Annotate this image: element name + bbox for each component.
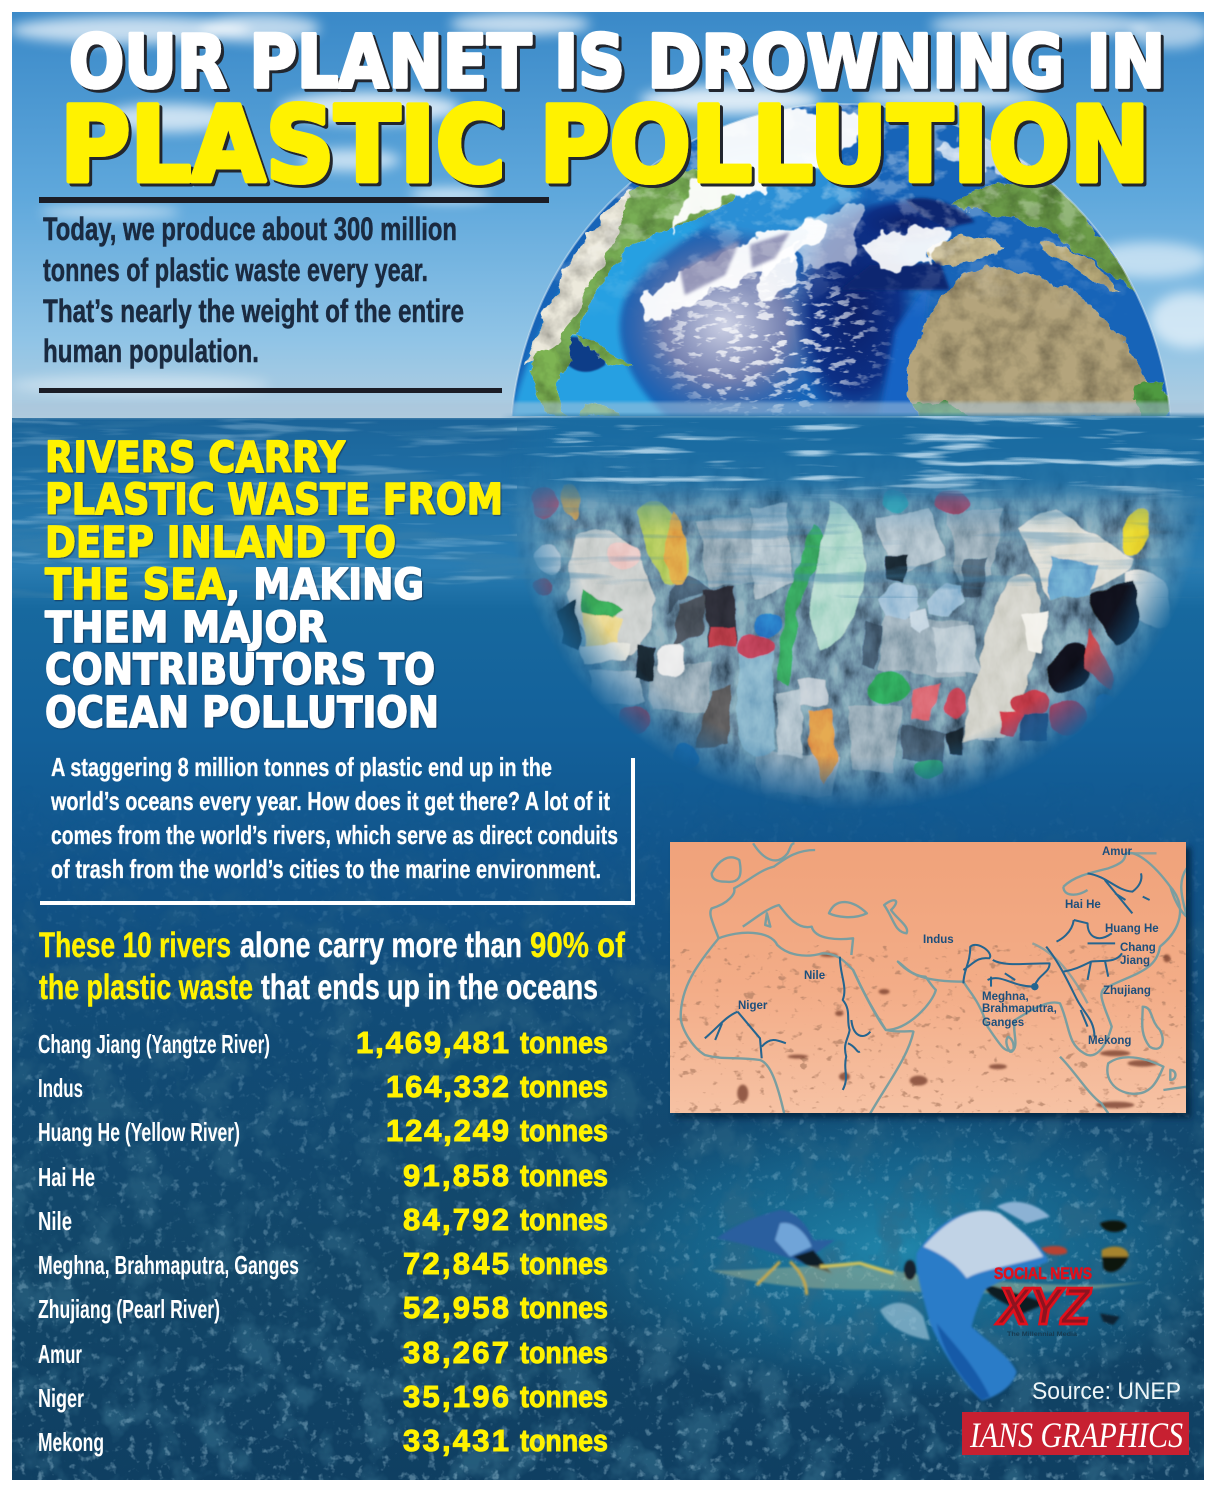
rivers sub-heading: alone carry more than	[240, 926, 522, 965]
rivers heading: THEM MAJOR	[45, 603, 327, 653]
navy sea patches	[840, 198, 975, 290]
paragraph with bracket: of trash from the world’s cities to the marine environment.	[51, 854, 601, 884]
river names list: Niger	[38, 1383, 84, 1413]
river tonnage values: tonnes	[520, 1158, 608, 1193]
map labels	[738, 846, 1159, 1047]
map labels: Chang	[1120, 942, 1156, 954]
map labels: Meghna,	[982, 991, 1029, 1003]
river names list: Mekong	[38, 1427, 104, 1457]
cloud bands	[640, 108, 1030, 325]
river names list: Huang He (Yellow River)	[38, 1117, 240, 1147]
panel: river map	[670, 842, 1191, 1113]
river tonnage values: 84,792	[403, 1202, 509, 1237]
intro text block: tonnes of plastic waste every year.	[43, 252, 428, 288]
map labels: Ganges	[982, 1017, 1024, 1029]
river tonnage values: 91,858	[403, 1158, 509, 1193]
rivers sub-heading: 90% of	[530, 926, 625, 965]
map labels: Zhujiang	[1103, 985, 1151, 997]
river tonnage values: 52,958	[403, 1290, 509, 1325]
river tonnage values: tonnes	[520, 1246, 608, 1281]
river tonnage values: tonnes	[520, 1113, 608, 1148]
map labels: Huang He	[1105, 923, 1159, 935]
rivers heading: , MAKING	[226, 560, 424, 610]
river tonnage values: 1,469,481	[356, 1025, 509, 1060]
globe: plastic waste underwater	[514, 472, 1195, 806]
rivers heading	[45, 433, 503, 738]
title line 2: PLASTIC POLLUTION	[60, 84, 1150, 206]
river tonnage values: tonnes	[520, 1423, 608, 1458]
rivers sub-heading: the plastic waste	[39, 968, 253, 1007]
river tonnage values: tonnes	[520, 1069, 608, 1104]
river tonnage values: tonnes	[520, 1290, 608, 1325]
bottles	[703, 587, 737, 646]
map labels: Indus	[923, 934, 954, 946]
paragraph with bracket: A staggering 8 million tonnes of plastic end up in the	[51, 752, 552, 782]
continent: Europe	[950, 180, 1138, 292]
rivers heading: RIVERS CARRY	[45, 433, 346, 483]
top rule	[39, 197, 549, 203]
map labels: Niger	[738, 1000, 768, 1012]
translucent bottles filling the mass	[647, 508, 1004, 797]
watermark: social news xyz: XYZ	[995, 1278, 1092, 1336]
continents with rocky texture	[526, 172, 1172, 420]
river names list: Amur	[38, 1339, 82, 1369]
rivers heading: PLASTIC WASTE FROM	[45, 475, 503, 525]
turquoise glow behind plastic bag	[578, 1121, 1204, 1384]
river names list	[38, 1029, 299, 1457]
map labels: Amur	[1102, 846, 1133, 858]
dark pollution hotspots	[737, 953, 1170, 1108]
globe limb	[511, 103, 1171, 416]
globe: upper earth above the water	[511, 103, 1171, 416]
source line: Source: UNEP	[1032, 1378, 1181, 1405]
photo: floating plastic debris	[710, 1202, 1147, 1401]
river names list: Chang Jiang (Yangtze River)	[38, 1029, 270, 1059]
paragraph with bracket	[40, 752, 633, 903]
river tonnage values: 38,267	[403, 1335, 509, 1370]
river tonnage values: 72,845	[403, 1246, 509, 1281]
river tonnage values: 33,431	[403, 1423, 509, 1458]
continent: Central America	[532, 335, 634, 418]
caps	[935, 490, 971, 514]
sea surface waves over the globe	[12, 402, 1204, 598]
river names list: Meghna, Brahmaputra, Ganges	[38, 1250, 299, 1280]
continent: North America	[540, 172, 740, 372]
rivers sub-heading: that ends up in the oceans	[261, 968, 598, 1007]
river tonnage values	[356, 1025, 608, 1458]
intro text block	[43, 211, 464, 369]
map labels: Jiang	[1120, 955, 1150, 967]
watermark: social news xyz: The Millennial Media	[1007, 1332, 1078, 1338]
river tonnage values: tonnes	[520, 1335, 608, 1370]
coastlines	[681, 843, 1191, 1113]
paragraph with bracket: comes from the world’s rivers, which serve as direct conduits	[51, 820, 618, 850]
map labels: Nile	[804, 970, 825, 982]
rivers heading: THE SEA	[45, 560, 227, 610]
river tonnage values: 164,332	[386, 1069, 509, 1104]
rivers heading: OCEAN POLLUTION	[45, 688, 439, 738]
river tonnage values: tonnes	[520, 1379, 608, 1414]
plastic bags	[567, 530, 654, 654]
black gaps	[1049, 579, 1139, 692]
clouds in sky	[10, 12, 1214, 395]
rivers sub-heading	[39, 926, 625, 1007]
map labels: Brahmaputra,	[982, 1003, 1057, 1015]
river tonnage values: 124,249	[386, 1113, 509, 1148]
intro text block: human population.	[43, 333, 259, 369]
lower rule	[39, 388, 502, 393]
intro text block: That’s nearly the weight of the entire	[43, 293, 464, 329]
crumpled plastic sheen	[522, 485, 1188, 800]
rivers	[705, 873, 1150, 1090]
map labels: Mekong	[1088, 1035, 1131, 1047]
underwater reef texture	[12, 780, 1204, 1480]
river names list: Indus	[38, 1073, 83, 1103]
map labels: Hai He	[1065, 899, 1101, 911]
paragraph with bracket: world’s oceans every year. How does it get there? A lot of it	[50, 786, 610, 816]
icon: plastic bag	[880, 1202, 1050, 1401]
river names list: Zhujiang (Pearl River)	[38, 1294, 220, 1324]
river tonnage values: tonnes	[520, 1025, 608, 1060]
intro text block: Today, we produce about 300 million	[43, 211, 457, 247]
rivers heading: DEEP INLAND TO	[45, 518, 396, 568]
river tonnage values: tonnes	[520, 1202, 608, 1237]
rivers sub-heading: These 10 rivers	[39, 926, 231, 965]
river names list: Nile	[38, 1206, 72, 1236]
river names list: Hai He	[38, 1162, 95, 1192]
ocean shading	[512, 163, 956, 416]
watermark: social news xyz: SOCIAL NEWS	[994, 1264, 1092, 1283]
rivers heading: CONTRIBUTORS TO	[45, 645, 435, 695]
river tonnage values: 35,196	[403, 1379, 509, 1414]
continent: Africa	[909, 267, 1172, 420]
